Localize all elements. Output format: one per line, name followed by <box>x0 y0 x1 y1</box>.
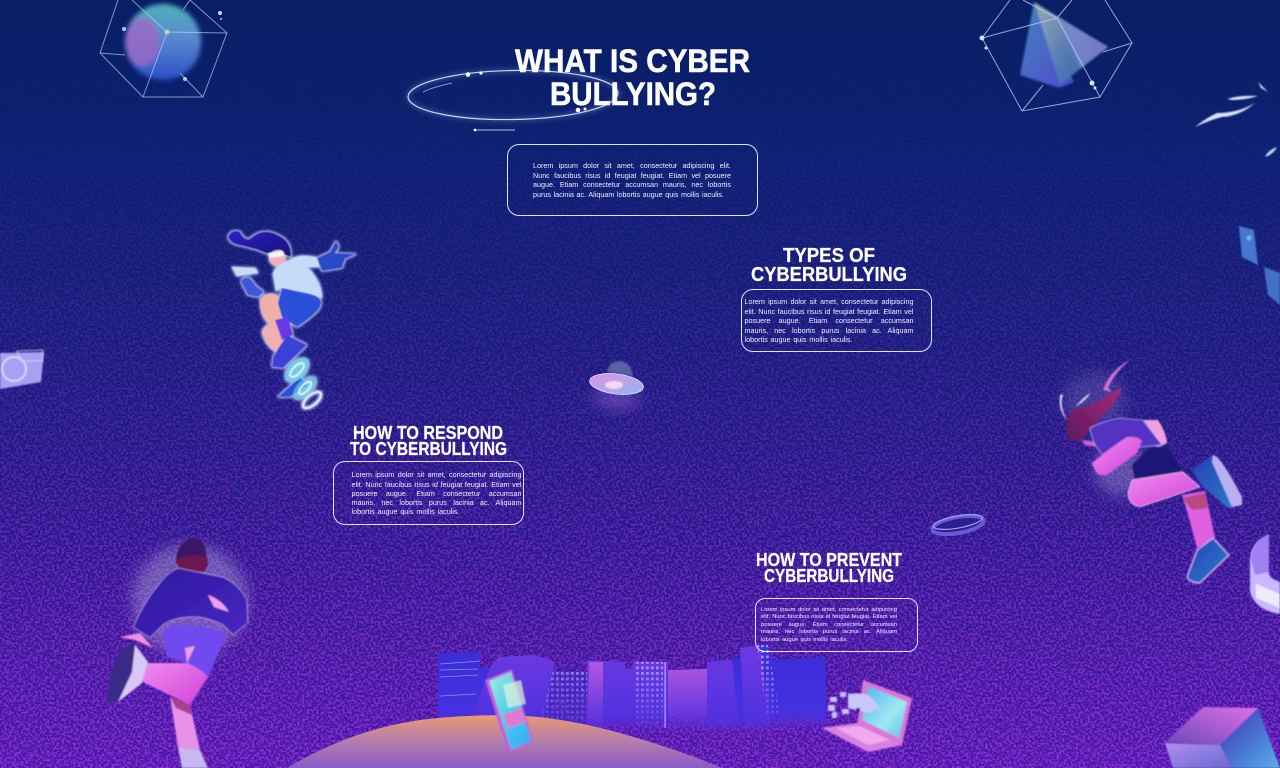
panel: intro text: purus lacinia ac. Aliquam lobortis augue quis mollis iaculis. <box>533 190 724 198</box>
title: BULLYING? <box>550 76 716 112</box>
panel: respond text: Lorem ipsum dolor sit amet, consectetur adipiscing <box>352 470 522 479</box>
panel: intro text <box>507 144 758 216</box>
panel: prevent text <box>755 598 918 652</box>
panel: prevent text: posuere augue. Etiam consectetur accumsan <box>761 622 897 628</box>
panel: prevent text: elit. Nunc faucibus risus id feugiat feugiat. Etiam vel <box>761 614 897 620</box>
icon: wireframe cube with orb <box>100 0 227 97</box>
icon: ring with sparks <box>408 69 618 131</box>
heading: how to prevent <box>756 550 902 586</box>
panel: prevent text: Lorem ipsum dolor sit amet, consectetur adipiscing <box>761 606 897 612</box>
panel: types text <box>741 289 932 352</box>
panel: types text: Lorem ipsum dolor sit amet, consectetur adipiscing <box>744 297 914 306</box>
panel: types text: lobortis augue quis mollis iaculis. <box>744 335 852 344</box>
heading: how to respond <box>350 423 507 459</box>
panel: types text: elit. Nunc faucibus risus id feugiat feugiat. Etiam vel <box>744 307 914 316</box>
panel: respond text: mauris, nec lobortis purus lacinia ac. Aliquam <box>352 498 522 507</box>
icon: floating ring <box>931 512 985 537</box>
illustration: running person <box>107 538 248 768</box>
panel: respond text: elit. Nunc faucibus risus id feugiat feugiat. Etiam vel <box>352 480 522 488</box>
heading: types of cyberbullying <box>751 245 907 286</box>
icon: flying shards <box>1195 82 1277 157</box>
title: WHAT IS CYBER <box>515 43 750 79</box>
icon: screen fragment left <box>0 350 44 389</box>
panel: types text: mauris, nec lobortis purus lacinia ac. Aliquam <box>744 326 914 335</box>
panel: types text: posuere augue. Etiam consectetur accumsan <box>744 316 914 325</box>
panel: respond text <box>333 461 524 525</box>
icon: 3D cube <box>1165 707 1280 768</box>
illustration: city skyline <box>438 643 827 734</box>
title <box>515 43 750 112</box>
icon: ufo <box>588 361 645 410</box>
panel: respond text: lobortis augue quis mollis iaculis. <box>352 507 460 516</box>
heading: types of cyberbullying: TYPES OF <box>783 245 875 267</box>
panel: intro text: Lorem ipsum dolor sit amet, consectetur adipiscing elit. <box>533 161 731 170</box>
illustration: planet hill <box>287 715 722 768</box>
panel: intro text: augue. Etiam consectetur accumsan mauris, nec lobortis <box>533 180 731 189</box>
heading: types of cyberbullying: CYBERBULLYING <box>751 264 907 286</box>
icon: laptop with robot hand <box>822 680 912 752</box>
panel: intro text: Nunc faucibus risus id feugiat feugiat. Etiam vel posuere <box>533 170 731 180</box>
panel: prevent text: mauris, nec lobortis purus lacinia ac. Aliquam <box>761 629 897 635</box>
panel: prevent text: lobortis augue quis mollis iaculis. <box>761 637 848 643</box>
heading: how to respond: HOW TO RESPOND <box>353 423 503 443</box>
panel: respond text: posuere augue. Etiam consectetur accumsan <box>352 489 522 498</box>
illustration: skater girl <box>228 231 356 411</box>
icon: curved band right <box>1250 534 1280 614</box>
heading: how to prevent: HOW TO PREVENT <box>756 550 902 570</box>
heading: how to prevent: CYBERBULLYING <box>764 566 894 586</box>
heading: how to respond: TO CYBERBULLYING <box>350 439 507 459</box>
icon: floating cards right <box>1239 226 1280 305</box>
icon: smartphone <box>485 669 533 753</box>
illustration: falling runner <box>1060 360 1242 583</box>
icon: wireframe cube with pyramid <box>980 0 1132 111</box>
